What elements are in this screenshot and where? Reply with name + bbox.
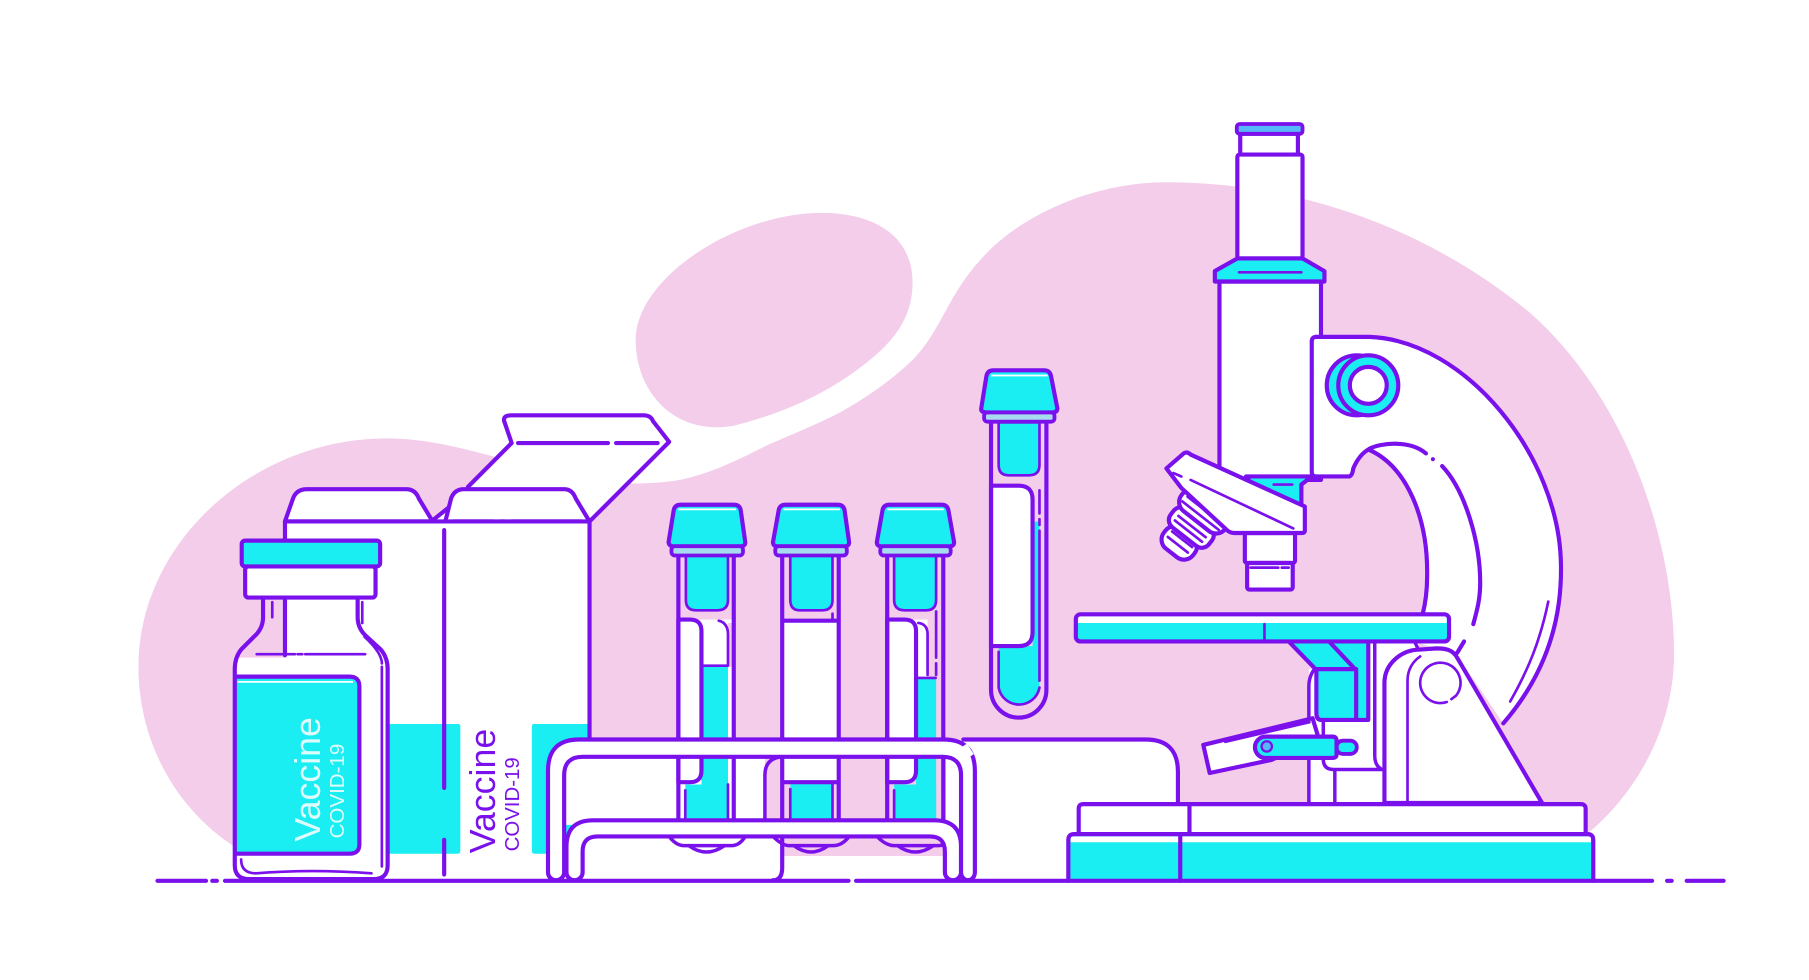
test tube rack — [548, 740, 975, 880]
arm foot — [1384, 641, 1542, 803]
teal nosepiece — [1246, 476, 1312, 508]
tube bases — [669, 836, 954, 852]
vial label: Vaccine — [288, 717, 328, 842]
test tube 3 — [877, 505, 954, 821]
vial label: COVID-19 — [326, 744, 349, 838]
teal stage support — [1289, 641, 1368, 720]
microscope base upper — [1079, 804, 1586, 834]
white areas behind rack — [564, 740, 1178, 880]
test tube 4 standalone — [981, 370, 1057, 718]
ground line — [157, 879, 1724, 883]
body tube — [1219, 281, 1321, 480]
teal collar — [1215, 258, 1324, 281]
vial label — [235, 677, 359, 854]
test tube 1 — [669, 505, 745, 820]
angled objective lens — [1150, 485, 1233, 570]
background blobs — [138, 182, 1674, 856]
box flaps — [285, 489, 590, 521]
turret plate — [1166, 452, 1305, 533]
rear rack arch — [765, 757, 785, 820]
microscope arm — [1312, 337, 1561, 723]
vial glass body — [235, 658, 386, 879]
box label text — [463, 729, 524, 853]
vial outline — [235, 598, 388, 879]
test tube 2 — [773, 505, 849, 820]
eyepiece — [1237, 124, 1303, 258]
teal box print panels — [388, 724, 590, 854]
vial inner contour — [241, 602, 382, 873]
box edges — [285, 521, 590, 874]
microscope base lower — [1068, 834, 1593, 881]
focus knob — [1327, 355, 1398, 415]
box label text: COVID-19 — [502, 757, 524, 851]
vaccine carton box — [285, 415, 669, 880]
rack upper frame — [548, 740, 975, 880]
right objective — [1245, 533, 1295, 590]
vial cap — [242, 541, 380, 566]
rack lower frame — [566, 820, 961, 880]
microscope — [1068, 124, 1593, 881]
box body — [285, 521, 590, 880]
open lid flap — [433, 415, 669, 520]
vaccine vial — [235, 541, 388, 879]
microscope stage — [1076, 614, 1449, 641]
stage clip lever — [1203, 718, 1357, 773]
clip handle — [1255, 737, 1357, 758]
vial collar — [245, 566, 376, 598]
white column behind stage — [1309, 641, 1419, 803]
box label text: Vaccine — [463, 729, 503, 853]
